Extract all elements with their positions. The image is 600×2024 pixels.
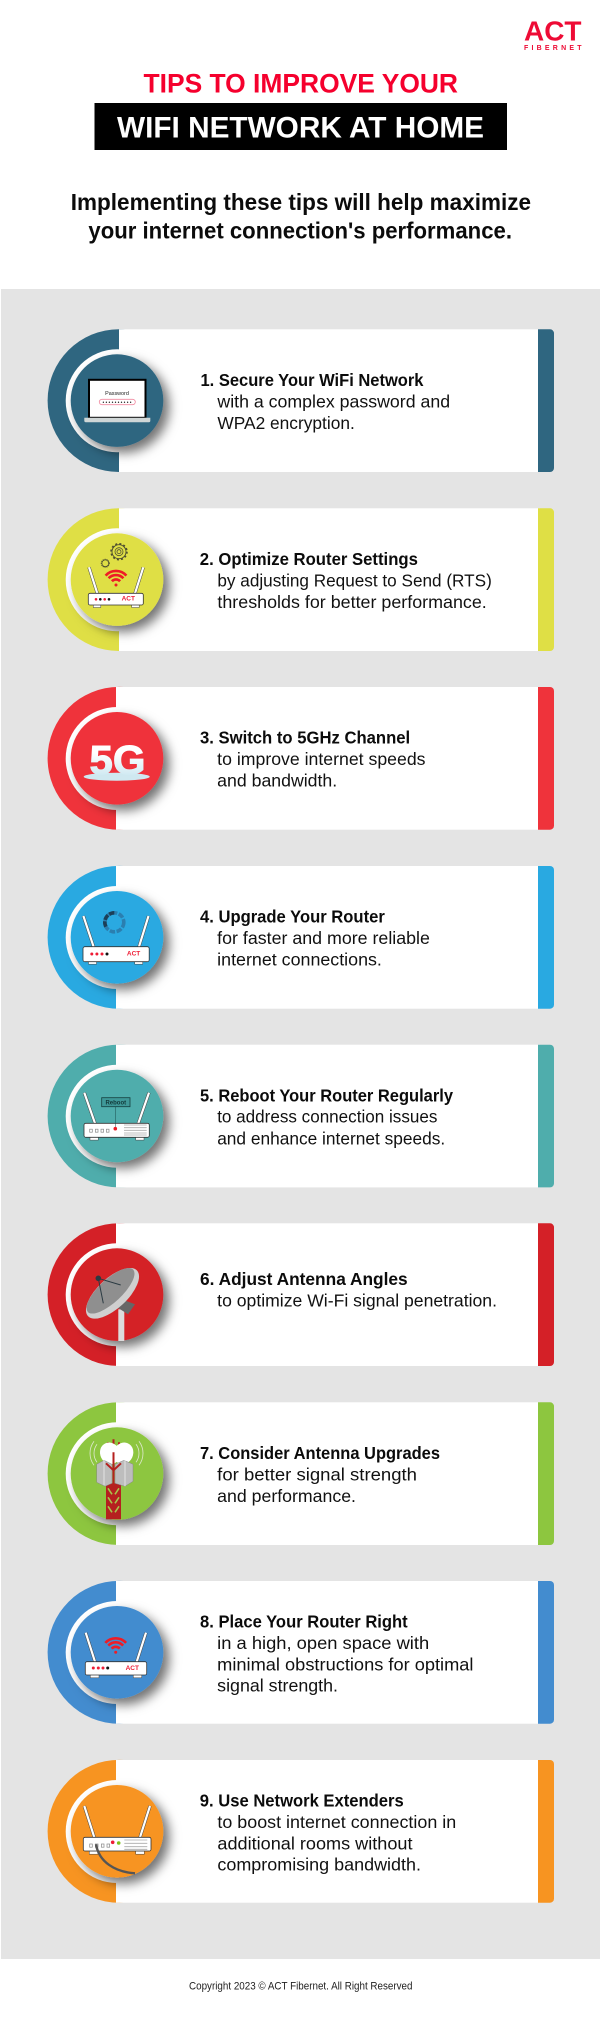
tip 5 icon disc bbox=[71, 1070, 163, 1162]
icon: router with reboot button bbox=[84, 1093, 149, 1140]
tip 9 accent bar bbox=[538, 1760, 554, 1903]
tip 2 text: 2. Optimize Router Settings bbox=[200, 549, 418, 569]
tip 4 colour arc bbox=[48, 866, 190, 1009]
tip 6 text bbox=[200, 1269, 497, 1310]
tip 1 text bbox=[200, 370, 450, 433]
tip 9 text bbox=[200, 1791, 456, 1875]
tip 5 text: 5. Reboot Your Router Regularly bbox=[200, 1085, 453, 1105]
tip 9 text: 9. Use Network Extenders bbox=[200, 1791, 404, 1811]
icon: laptop with password: Password bbox=[105, 391, 129, 397]
tip 3 card bbox=[116, 687, 540, 830]
tip 1 accent bar bbox=[538, 329, 554, 472]
tip 7 icon disc bbox=[71, 1427, 163, 1520]
tip 9 text: to boost internet connection in bbox=[217, 1812, 456, 1832]
icon: router with reboot button: Reboot bbox=[105, 1101, 126, 1107]
tip 8 text: minimal obstructions for optimal bbox=[217, 1654, 473, 1674]
icon: laptop with password: •••••••••• bbox=[102, 400, 132, 406]
tip 8 accent bar bbox=[538, 1581, 554, 1724]
tip 1 colour arc bbox=[48, 329, 190, 472]
tip 7 colour arc bbox=[48, 1402, 190, 1545]
tip 6 accent bar bbox=[538, 1223, 554, 1366]
tip 9 icon disc bbox=[71, 1785, 163, 1878]
tip 5 accent bar bbox=[538, 1045, 554, 1187]
title: tips to improve your: TIPS TO IMPROVE YOUR bbox=[144, 69, 458, 99]
tip 3 white ring bbox=[66, 707, 169, 810]
tip 4 icon disc bbox=[71, 891, 163, 984]
tip 9 white ring bbox=[66, 1780, 169, 1883]
tip 1 card bbox=[119, 329, 540, 472]
panel: tip 4 upgrade router bbox=[48, 866, 554, 1009]
tip 2 text: thresholds for better performance. bbox=[217, 592, 487, 612]
tip 4 text: internet connections. bbox=[217, 950, 382, 970]
logo: ACT Fibernet: FIBERNET bbox=[524, 45, 582, 52]
tip 6 text: to optimize Wi-Fi signal penetration. bbox=[217, 1290, 497, 1310]
tip 8 text bbox=[200, 1612, 474, 1696]
icon: extender with cable bbox=[83, 1806, 151, 1873]
tip 6 card bbox=[116, 1223, 540, 1366]
icon: router with wifi: ACT bbox=[126, 1665, 139, 1672]
tip 5 card bbox=[116, 1045, 540, 1187]
tip 9 text: compromising bandwidth. bbox=[217, 1855, 421, 1875]
tip 3 icon disc bbox=[71, 712, 163, 805]
intro text: your internet connection's performance. bbox=[88, 217, 512, 243]
panel: tip 2 router settings bbox=[48, 508, 554, 651]
tip 6 icon disc bbox=[71, 1248, 163, 1341]
tip 4 text: 4. Upgrade Your Router bbox=[200, 907, 385, 927]
tip 8 text: in a high, open space with bbox=[217, 1633, 429, 1653]
icon: laptop with password bbox=[84, 380, 150, 422]
tip 8 colour arc bbox=[48, 1581, 190, 1724]
tip 4 card bbox=[116, 866, 540, 1009]
panel: tip 8 router placement bbox=[48, 1581, 554, 1724]
tip 9 text: additional rooms without bbox=[217, 1833, 413, 1853]
panel: tip 3 5GHz channel bbox=[48, 687, 554, 830]
tip 2 card bbox=[119, 508, 540, 651]
tip 2 accent bar bbox=[538, 508, 554, 651]
intro text bbox=[71, 189, 531, 243]
tip 6 text: 6. Adjust Antenna Angles bbox=[200, 1269, 408, 1289]
tip 7 text: 7. Consider Antenna Upgrades bbox=[200, 1443, 440, 1463]
icon: router with wifi bbox=[85, 1633, 147, 1678]
tip 3 text bbox=[200, 728, 426, 791]
tip 1 white ring bbox=[66, 349, 169, 452]
tip 8 card bbox=[116, 1581, 540, 1724]
tip 8 icon disc bbox=[71, 1606, 163, 1699]
tip 8 text: 8. Place Your Router Right bbox=[200, 1612, 408, 1632]
panel: tip 6 antenna angles bbox=[48, 1223, 554, 1366]
panel: tip 1 secure wifi bbox=[48, 329, 554, 472]
tip 1 text: WPA2 encryption. bbox=[217, 413, 355, 433]
tip 3 text: and bandwidth. bbox=[217, 771, 337, 791]
tip 7 white ring bbox=[66, 1422, 169, 1525]
icon: router with loading spinner bbox=[83, 913, 149, 964]
icon: satellite dish bbox=[78, 1259, 147, 1341]
tip 2 icon disc bbox=[71, 533, 163, 626]
tip 5 text: to address connection issues bbox=[217, 1107, 438, 1127]
logo: ACT Fibernet: ACT bbox=[524, 16, 582, 46]
tip 5 colour arc bbox=[48, 1045, 190, 1187]
tip 3 text: to improve internet speeds bbox=[217, 749, 426, 769]
tip 8 white ring bbox=[66, 1601, 169, 1704]
tip 1 text: with a complex password and bbox=[216, 391, 450, 411]
icon: router with loading spinner: ACT bbox=[127, 950, 140, 958]
tip 4 text: for faster and more reliable bbox=[217, 928, 430, 948]
tip 7 accent bar bbox=[538, 1402, 554, 1545]
tip 5 text: and enhance internet speeds. bbox=[217, 1128, 445, 1148]
tip 7 text: and performance. bbox=[217, 1486, 356, 1506]
tip 9 card bbox=[116, 1760, 540, 1903]
tip 7 text bbox=[200, 1443, 440, 1506]
tip 1 icon disc bbox=[71, 354, 163, 447]
tip 5 white ring bbox=[66, 1065, 169, 1168]
tip 6 white ring bbox=[66, 1243, 169, 1346]
footer copyright: Copyright 2023 © ACT Fibernet. All Right Reserved bbox=[189, 1980, 413, 1992]
tip 2 colour arc bbox=[48, 508, 190, 651]
icon: router with gears bbox=[88, 544, 143, 608]
panel: tip 5 reboot router bbox=[48, 1045, 554, 1187]
tip 4 text bbox=[200, 907, 430, 970]
title banner: wifi network at home bbox=[94, 103, 507, 150]
tip 9 colour arc bbox=[48, 1760, 190, 1903]
panel: tip 9 network extenders bbox=[48, 1760, 554, 1903]
icon: antenna tower bbox=[90, 1439, 143, 1519]
tip 5 text bbox=[200, 1085, 453, 1148]
icon: 5G: 5G bbox=[90, 737, 146, 783]
icon: router with gears: ACT bbox=[122, 596, 135, 603]
tip 2 text: by adjusting Request to Send (RTS) bbox=[217, 570, 492, 590]
tip 4 accent bar bbox=[538, 866, 554, 1009]
tip 3 accent bar bbox=[538, 687, 554, 830]
title banner: wifi network at home: WIFI NETWORK AT HOME bbox=[117, 112, 484, 145]
tip 2 white ring bbox=[66, 528, 169, 631]
tip 3 colour arc bbox=[48, 687, 190, 830]
tip 6 colour arc bbox=[48, 1223, 190, 1366]
panel: tip 7 antenna upgrades bbox=[48, 1402, 554, 1545]
tip 1 text: 1. Secure Your WiFi Network bbox=[200, 370, 424, 390]
tip 3 text: 3. Switch to 5GHz Channel bbox=[200, 728, 410, 748]
tip 4 white ring bbox=[66, 886, 169, 989]
tip 2 text bbox=[200, 549, 492, 612]
tip 7 card bbox=[116, 1402, 540, 1545]
tip 7 text: for better signal strength bbox=[217, 1464, 417, 1484]
intro text: Implementing these tips will help maximize bbox=[71, 189, 531, 215]
tip 8 text: signal strength. bbox=[217, 1676, 338, 1696]
